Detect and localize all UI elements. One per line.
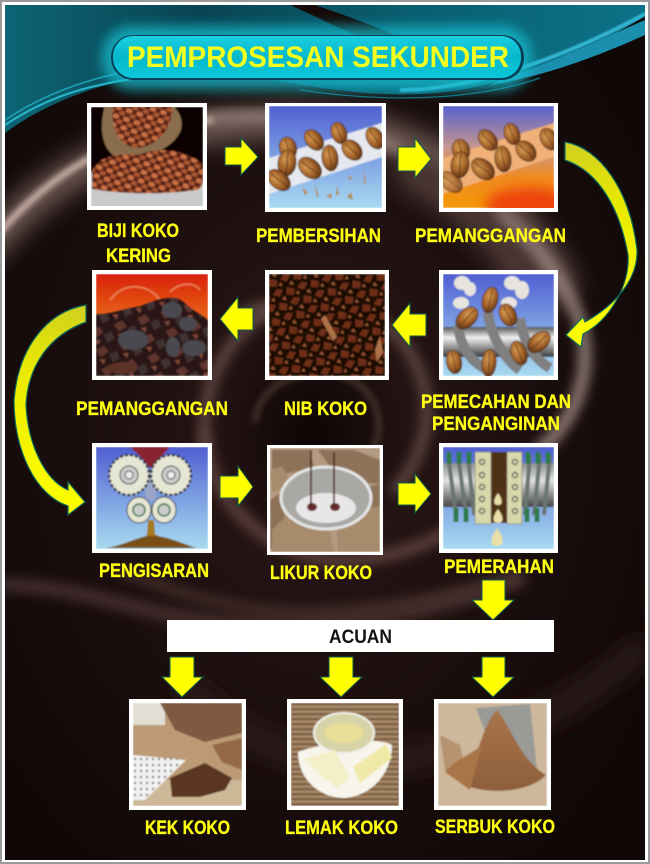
teal swoosh header <box>5 5 645 133</box>
arrow: cleaning to roasting <box>398 138 431 178</box>
label: pemanggangan middle: PEMANGGANGAN <box>76 399 228 420</box>
label: pemecahan dan penganginan: PEMECAHAN DAN <box>421 392 571 413</box>
arrow: to cake <box>162 657 203 697</box>
photo: pressing <box>439 443 558 553</box>
photo: roasting <box>436 103 575 223</box>
photo: cocoa butter <box>287 699 403 810</box>
label: biji koko kering: BIJI KOKO <box>97 221 179 242</box>
arrow: beans to cleaning <box>225 138 258 175</box>
label: pemanggangan top: PEMANGGANGAN <box>415 226 566 247</box>
label: pengisaran: PENGISARAN <box>99 561 209 582</box>
photo: cocoa powder <box>434 699 551 810</box>
arrow: winnowing to nib <box>392 303 426 347</box>
photo: cocoa nibs <box>265 270 389 380</box>
arrow: liquor to pressing <box>398 474 431 513</box>
arrow: to powder <box>472 657 514 697</box>
label: biji koko kering: KERING <box>106 246 171 267</box>
label: kek koko: KEK KOKO <box>145 818 230 839</box>
label: pembersihan: PEMBERSIHAN <box>256 226 381 247</box>
photo: dried cocoa beans <box>87 103 207 210</box>
label: pemecahan dan penganginan: PENGANGINAN <box>432 414 560 435</box>
photo: cocoa cake <box>129 699 246 810</box>
acuan bar: ACUAN <box>329 627 392 648</box>
label: nib koko: NIB KOKO <box>284 399 367 420</box>
photo: grinding <box>92 443 212 553</box>
photo: cracking and winnowing <box>439 270 558 380</box>
photo: roasted heap <box>92 270 212 380</box>
photo: cleaning <box>264 103 388 212</box>
title <box>102 26 532 90</box>
photo: cocoa liquor <box>267 445 383 555</box>
arrow: grinding to liquor <box>220 466 253 506</box>
arrow: pressing to molding <box>472 580 514 620</box>
label: pemerahan: PEMERAHAN <box>444 557 554 578</box>
label: pemecahan dan penganginan <box>421 392 571 435</box>
curved arrow: roasting to winnowing <box>565 142 637 347</box>
arrow: to butter <box>320 657 362 697</box>
label: serbuk koko: SERBUK KOKO <box>435 817 555 838</box>
label: likur koko: LIKUR KOKO <box>270 563 372 584</box>
label: lemak koko: LEMAK KOKO <box>285 818 398 839</box>
curved arrow: roasting to grinding <box>14 305 86 515</box>
label: biji koko kering <box>97 221 179 267</box>
arrow: nib to roasting <box>220 297 253 341</box>
title: PEMPROSESAN SEKUNDER <box>127 41 509 74</box>
acuan bar <box>167 620 554 652</box>
